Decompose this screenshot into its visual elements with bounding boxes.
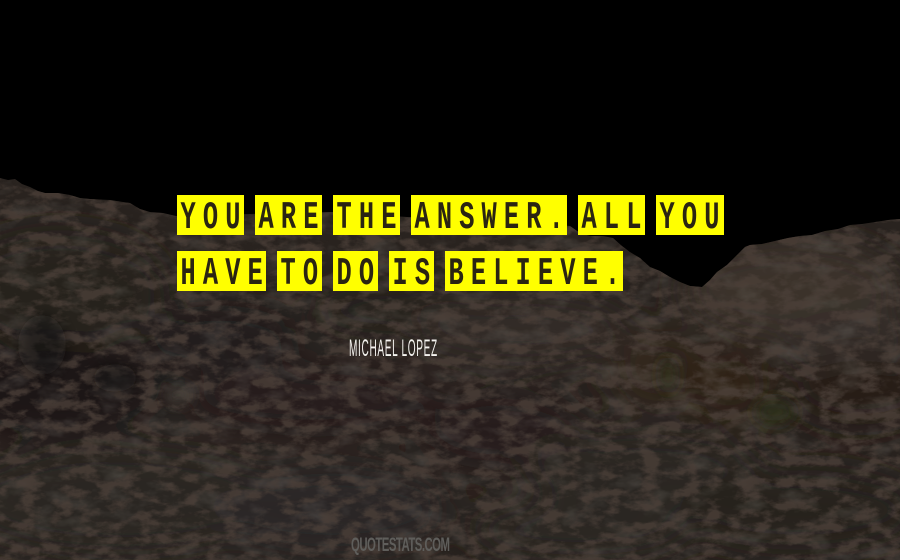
quote word: ANSWER.: ANSWER. (415, 196, 564, 240)
quote (177, 195, 724, 296)
quote word: DO: DO (337, 252, 374, 296)
watermark: QuoteStats.com: QUOTESTATS.COM (351, 535, 450, 556)
quote word: BELIEVE.: BELIEVE. (449, 252, 620, 296)
quote word: ALL: ALL (582, 196, 641, 240)
quote word: ARE: ARE (259, 196, 318, 240)
quote word: YOU (second): YOU (660, 196, 719, 240)
quote word: IS: IS (393, 252, 430, 296)
quote word: THE: THE (337, 196, 396, 240)
background: rocky terrain (0, 170, 900, 560)
author name: MICHAEL LOPEZ (349, 334, 437, 361)
quote word: TO: TO (281, 252, 318, 296)
quote word: YOU: YOU (181, 196, 240, 240)
quote word: HAVE: HAVE (181, 252, 263, 296)
